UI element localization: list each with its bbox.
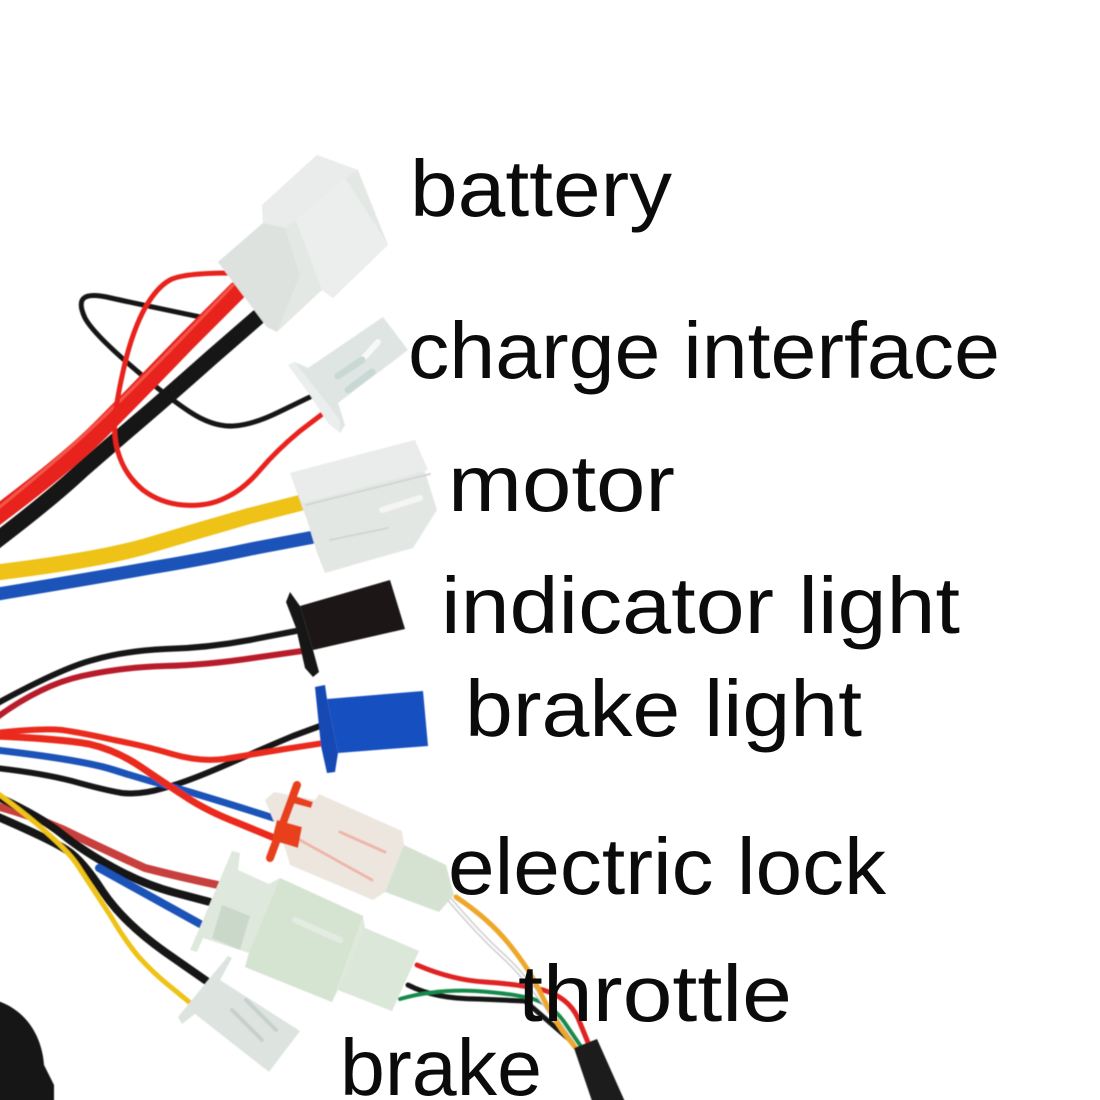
connector: battery [218, 155, 388, 332]
connector: brake light [315, 685, 428, 773]
connector: indicator light [286, 580, 405, 677]
connector: charge interface [288, 317, 408, 433]
motor wires [0, 503, 314, 595]
label: charge interface: charge interface [408, 306, 1000, 395]
brake light wires [0, 726, 324, 793]
throttle output wires [400, 897, 589, 1048]
label: electric lock: electric lock [448, 822, 887, 911]
connector: motor [290, 440, 437, 573]
throttle input and brake wires [0, 792, 218, 1006]
connector: brake [178, 956, 300, 1072]
black disc [0, 1001, 54, 1100]
connector: electric lock [265, 785, 454, 912]
label: battery: battery [410, 144, 672, 233]
electric lock wires [0, 736, 280, 837]
label: brake light: brake light [465, 664, 862, 753]
black cable [574, 1039, 626, 1100]
indicator light wires [0, 631, 302, 718]
connector: throttle [190, 851, 419, 1011]
battery and charge wires [0, 273, 325, 544]
red flange [270, 785, 297, 858]
wiring harness photo [0, 155, 626, 1100]
label: motor: motor [448, 439, 675, 528]
label: throttle: throttle [518, 949, 792, 1038]
label: indicator light: indicator light [441, 561, 960, 650]
